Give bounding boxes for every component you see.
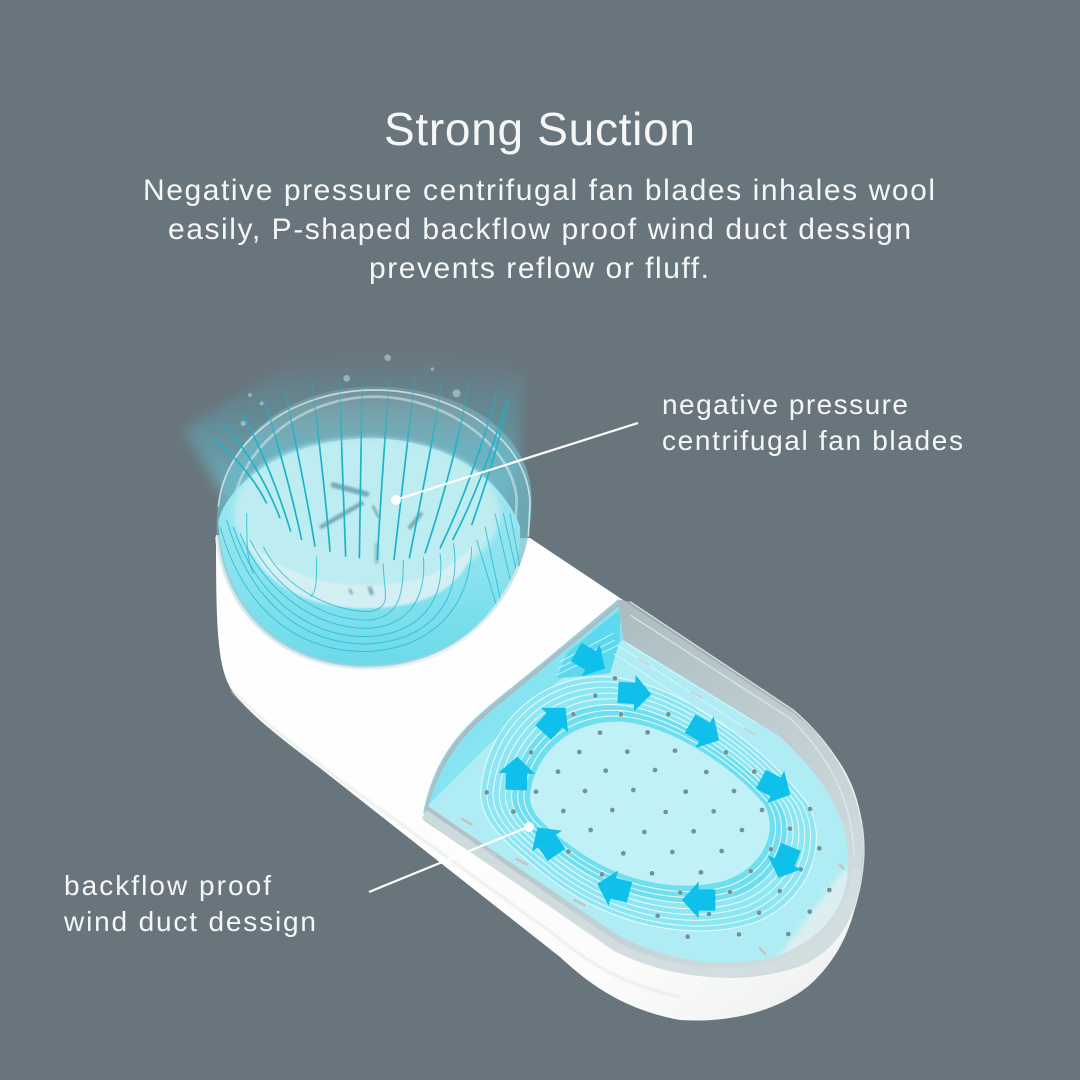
suction disc	[233, 438, 500, 588]
label: negative pressure centrifugal fan blades: negative pressure	[662, 389, 908, 420]
label: negative pressure centrifugal fan blades	[662, 389, 963, 456]
label: backflow proof wind duct dessign: backflow proof	[64, 870, 271, 901]
flow arrows	[498, 636, 808, 918]
ring band	[481, 677, 816, 931]
callout: fan blades pointer	[391, 423, 638, 505]
product illustration: lint remover	[183, 350, 877, 1021]
description text: easily, P-shaped backflow proof wind duct dessign	[168, 213, 911, 246]
front rim slots	[459, 657, 846, 956]
inlet stripes	[557, 633, 757, 730]
air duct chamber	[410, 590, 877, 990]
title: Strong Suction	[384, 103, 695, 155]
blue-edge left	[424, 601, 620, 813]
description text: Negative pressure centrifugal fan blades inhales wool	[143, 174, 935, 207]
rim of duct	[424, 814, 857, 972]
description text	[143, 174, 935, 285]
pale inner oval	[530, 722, 770, 886]
device body	[216, 535, 863, 1021]
intake streaks	[213, 368, 508, 560]
blue basin	[218, 438, 520, 665]
air vent holes	[484, 676, 832, 939]
description text: prevents reflow or fluff.	[369, 252, 709, 285]
body lower seam	[232, 690, 680, 997]
lower streamlines	[220, 513, 520, 652]
concentric track lines	[481, 677, 816, 931]
air intake glow	[183, 350, 525, 500]
duct floor	[428, 606, 848, 963]
label: backflow proof wind duct dessign	[63, 870, 316, 937]
label: backflow proof wind duct dessign: wind duct dessign	[63, 906, 316, 937]
dust particles	[241, 354, 461, 426]
cup front rim	[217, 537, 518, 668]
suction cup with fan	[183, 350, 532, 668]
label: negative pressure centrifugal fan blades: centrifugal fan blades	[662, 425, 963, 456]
back wall tint	[423, 603, 623, 810]
transparent cylinder	[217, 387, 532, 668]
transparent lid	[423, 599, 864, 978]
fan blades	[322, 485, 421, 593]
inlet block	[557, 610, 620, 678]
right frosted corner	[778, 869, 848, 956]
saturated inner band	[511, 705, 787, 902]
callout: wind duct pointer	[369, 822, 534, 892]
